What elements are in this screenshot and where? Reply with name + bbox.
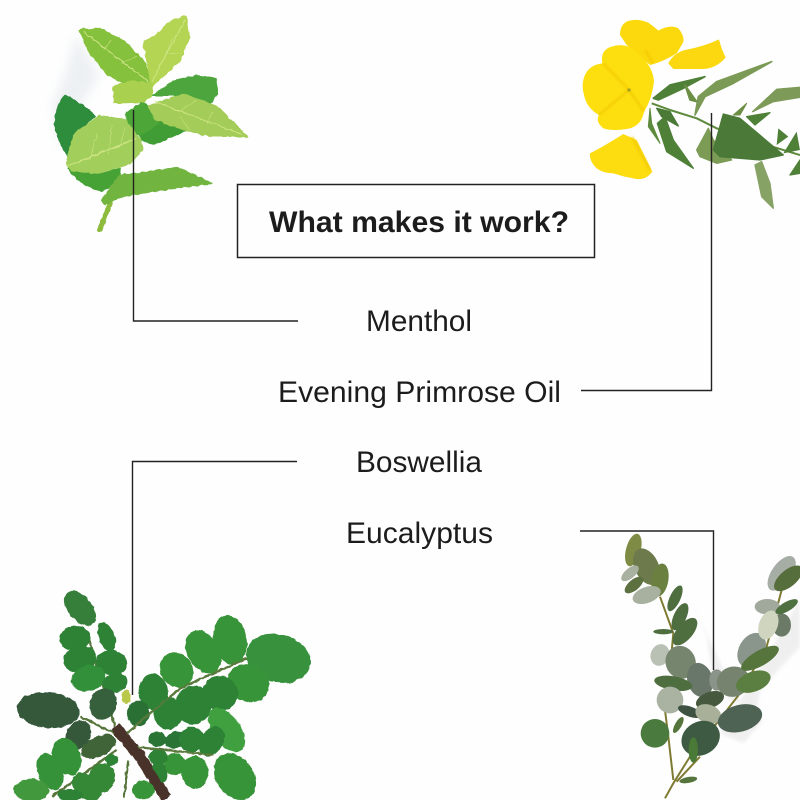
connector: menthol: [134, 110, 298, 321]
connector: boswellia: [132, 462, 297, 695]
label: boswellia: Boswellia: [356, 446, 482, 479]
label: menthol: Menthol: [366, 305, 472, 338]
title box: [238, 184, 594, 258]
icon: boswellia branch: [14, 585, 316, 800]
label: eucalyptus: Eucalyptus: [346, 517, 493, 550]
title: What makes it work?: [269, 206, 569, 239]
icon: mint sprig: [52, 16, 247, 230]
icon: evening primrose flower: [583, 20, 800, 208]
icon: eucalyptus branch: [619, 532, 800, 798]
connector: eucalyptus: [580, 531, 714, 670]
label: evening primrose oil: Evening Primrose Oil: [278, 376, 561, 409]
connector: evening primrose oil: [581, 113, 712, 390]
